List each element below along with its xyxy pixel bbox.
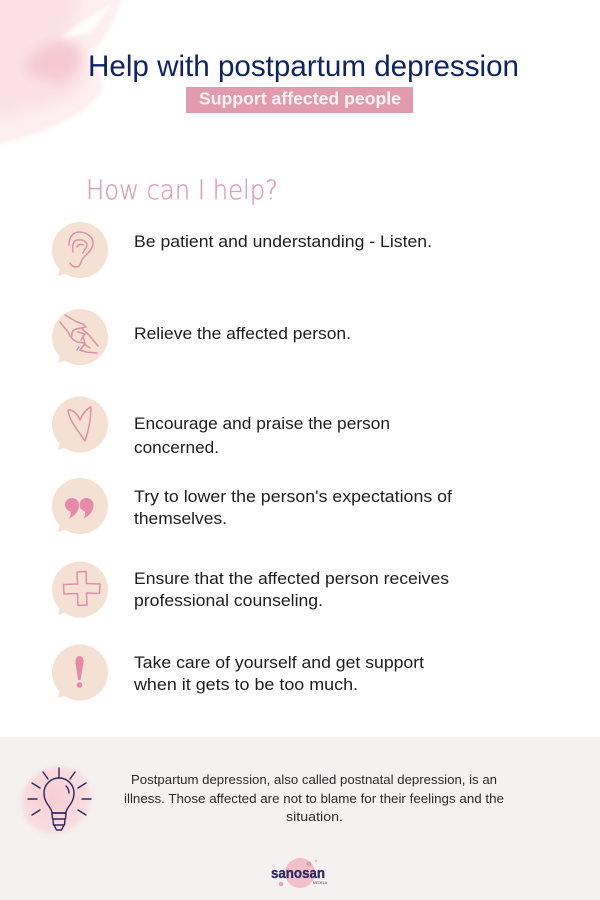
text: Relieve the affected person. — [134, 324, 351, 343]
background watercolor splash — [0, 0, 128, 148]
item 1: listen — [52, 222, 432, 278]
text: themselves. — [134, 509, 227, 528]
icon: medical cross — [52, 562, 108, 618]
logo: sanosan: sanosan — [271, 865, 325, 882]
logo: sanosan: MEDELA — [313, 881, 328, 885]
text: Ensure that the affected person receives — [134, 569, 449, 588]
text: concerned. — [134, 438, 219, 457]
note text: illness. Those affected are not to blame for their feelings and the — [124, 792, 504, 806]
title: Help with postpartum depression — [88, 50, 519, 83]
item 6: self care — [52, 644, 424, 700]
text — [134, 569, 449, 610]
text: Try to lower the person's expectations of — [134, 487, 452, 506]
logo: sanosan — [271, 858, 328, 888]
text — [134, 414, 390, 457]
note text: Postpartum depression, also called postnatal depression, is an — [131, 773, 497, 787]
note text: situation. — [286, 810, 343, 824]
icon: hands — [52, 309, 108, 365]
text: Be patient and understanding - Listen. — [134, 232, 432, 251]
text — [134, 487, 452, 528]
text: Take care of yourself and get support — [134, 653, 424, 672]
note text — [124, 773, 504, 824]
item 4: expectations — [52, 478, 452, 534]
subtitle banner: Support affected people — [199, 88, 401, 108]
icon: quote marks — [52, 478, 108, 534]
panel: footer — [0, 737, 600, 900]
text: when it gets to be too much. — [133, 675, 358, 694]
icon: heart — [52, 396, 108, 452]
text — [133, 653, 424, 694]
text: professional counseling. — [134, 591, 323, 610]
text: Encourage and praise the person — [134, 414, 390, 433]
icon: ear — [52, 222, 108, 278]
icon: exclamation mark — [52, 644, 108, 700]
item 5: counseling — [52, 562, 449, 618]
subtitle banner — [186, 87, 413, 113]
icon: light bulb — [22, 767, 91, 835]
item 3: encourage — [52, 396, 390, 457]
section heading: how can I help: How can I help? — [86, 175, 278, 206]
item 2: relieve — [52, 309, 351, 365]
